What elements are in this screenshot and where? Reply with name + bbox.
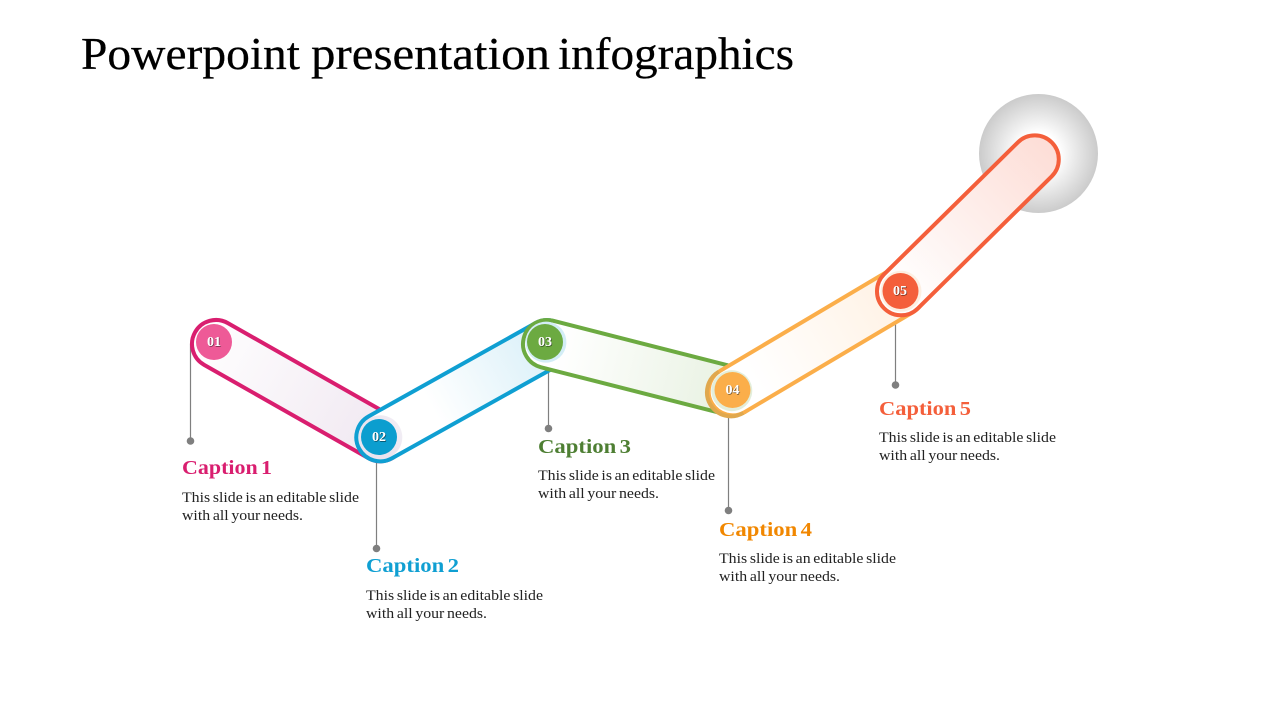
caption 2: Caption 2: [366, 555, 459, 577]
caption 1: This slide is an editable slide: [182, 490, 359, 506]
badge 04: 04: [726, 383, 740, 398]
segment 3: green pill: [518, 315, 762, 421]
caption 5: This slide is an editable slide: [879, 430, 1056, 446]
caption 2: with all your needs.: [366, 606, 487, 622]
segment 1: pink pill: [183, 311, 413, 470]
caption 5: Caption 5: [879, 398, 971, 420]
title: presentation: [311, 29, 550, 79]
badge 03: [527, 324, 563, 360]
segment 2: blue pill: [348, 311, 580, 470]
caption 4: This slide is an editable slide: [719, 551, 896, 567]
leader line: caption 1: [187, 344, 194, 445]
badge 02: [361, 419, 397, 455]
caption 1: with all your needs.: [182, 508, 303, 524]
caption 3: [538, 436, 715, 502]
leader line: caption 2: [373, 455, 380, 552]
caption 3: with all your needs.: [538, 486, 659, 502]
title: infographics: [558, 29, 794, 79]
title: [81, 29, 794, 79]
caption 1: Caption 1: [182, 457, 272, 479]
icon: grey sun circle: [979, 94, 1098, 213]
badge 05: 05: [893, 284, 907, 299]
caption 3: Caption 3: [538, 436, 631, 458]
leader line: caption 4: [725, 410, 732, 514]
leader line: caption 5: [892, 312, 899, 389]
badge 05: [882, 273, 918, 309]
badge 02: 02: [372, 430, 386, 445]
segment 4: orange pill: [698, 258, 934, 425]
title: Powerpoint: [81, 29, 301, 79]
caption 4: Caption 4: [719, 519, 812, 541]
caption 1: [182, 457, 359, 524]
segment 5: red pill: [867, 125, 1069, 325]
badge 04: [714, 372, 750, 408]
caption 3: This slide is an editable slide: [538, 468, 715, 484]
caption 5: with all your needs.: [879, 448, 1000, 464]
caption 2: [366, 555, 543, 622]
badge 03: 03: [538, 335, 552, 350]
leader line: caption 3: [545, 360, 552, 432]
caption 4: with all your needs.: [719, 569, 840, 585]
caption 2: This slide is an editable slide: [366, 588, 543, 604]
badge 01: [196, 324, 232, 360]
caption 5: [879, 398, 1056, 464]
badge 01: 01: [207, 335, 221, 350]
caption 4: [719, 519, 896, 585]
